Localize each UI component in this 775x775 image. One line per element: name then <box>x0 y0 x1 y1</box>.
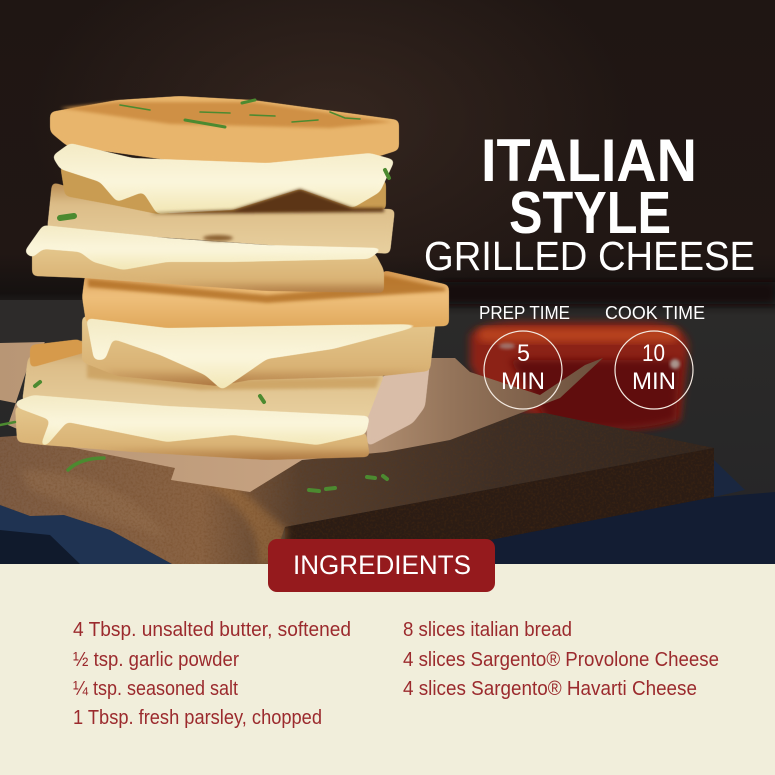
ingredients heading: INGREDIENTS <box>293 550 471 580</box>
sandwich 2 <box>24 182 395 293</box>
prep time <box>479 302 570 409</box>
title: STYLE <box>509 180 671 246</box>
title: GRILLED CHEESE <box>424 233 755 279</box>
sandwich stack <box>14 96 449 460</box>
ingredient list: left column: ¼ tsp. seasoned salt <box>73 678 238 700</box>
ingredient list: left column: 4 Tbsp. unsalted butter, softened <box>73 619 351 641</box>
cook time: COOK TIME <box>605 302 705 323</box>
parsley garnish <box>0 100 389 491</box>
parchment paper <box>0 342 603 492</box>
title: ITALIAN <box>481 127 697 194</box>
prep time: PREP TIME <box>479 302 570 323</box>
title <box>424 127 755 279</box>
sandwich 1 (top) <box>50 96 399 214</box>
ingredients panel <box>0 564 775 775</box>
ingredient list: right column: 4 slices Sargento® Provolone Cheese <box>403 649 719 671</box>
prep time: 5 <box>517 340 530 367</box>
photo background <box>0 0 775 564</box>
sauce jar <box>470 322 688 429</box>
ingredients heading <box>268 539 495 592</box>
ingredient list: right column: 4 slices Sargento® Havarti Cheese <box>403 678 697 700</box>
ingredient list: left column <box>73 619 351 729</box>
ingredient list: right column: 8 slices italian bread <box>403 619 572 641</box>
ingredient list: left column: 1 Tbsp. fresh parsley, chopped <box>73 707 322 729</box>
cook time <box>605 302 705 409</box>
cook time: 10 <box>642 340 665 367</box>
blue cloth <box>0 460 775 564</box>
sandwich 4 (bottom) <box>14 339 430 460</box>
ingredient list: left column: ½ tsp. garlic powder <box>73 649 239 671</box>
ingredient list: right column <box>403 619 719 700</box>
wooden board <box>0 413 714 564</box>
cook time: MIN <box>632 368 676 395</box>
prep time: MIN <box>501 368 545 395</box>
sandwich 3 <box>82 270 449 390</box>
